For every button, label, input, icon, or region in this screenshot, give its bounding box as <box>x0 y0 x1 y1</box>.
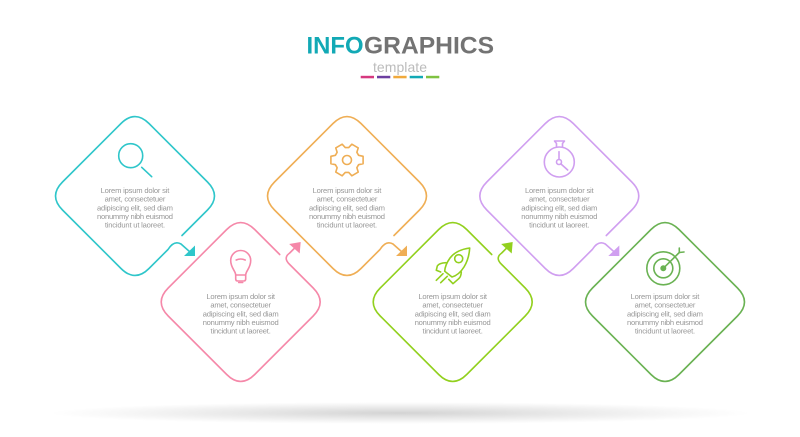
text block: nonummy nibh euismod <box>97 212 173 221</box>
text block: amet, consectetuer <box>422 301 484 310</box>
diamond outline with arrow <box>161 222 320 382</box>
text block: adipiscing elit, sed diam <box>627 309 703 318</box>
text block: tincidunt ut laoreet. <box>529 221 589 230</box>
text block <box>309 186 385 230</box>
diamond outline with arrow <box>373 222 532 382</box>
diamond outline with arrow <box>56 116 214 276</box>
text block: amet, consectetuer <box>105 195 166 204</box>
text block: adipiscing elit, sed diam <box>309 203 385 212</box>
icon: stopwatch <box>544 141 574 177</box>
text block: Lorem ipsum dolor sit <box>101 186 170 195</box>
text block: adipiscing elit, sed diam <box>521 203 597 212</box>
colour dashes <box>361 76 439 78</box>
text block <box>627 292 703 336</box>
text block: tincidunt ut laoreet. <box>423 327 483 336</box>
text block: Lorem ipsum dolor sit <box>525 186 595 195</box>
diamond outline <box>586 222 744 382</box>
icon: magnifier <box>119 144 152 177</box>
text block: tincidunt ut laoreet. <box>211 327 271 336</box>
text block: nonummy nibh euismod <box>203 318 279 327</box>
text block: adipiscing elit, sed diam <box>415 309 491 318</box>
text block: adipiscing elit, sed diam <box>97 203 173 212</box>
icon: gear <box>331 144 363 176</box>
text block: Lorem ipsum dolor sit <box>206 292 276 301</box>
panel: step 1 search <box>56 116 214 276</box>
text block: tincidunt ut laoreet. <box>635 327 695 336</box>
text block: Lorem ipsum dolor sit <box>313 186 382 195</box>
text block: nonummy nibh euismod <box>521 212 597 221</box>
text block: amet, consectetuer <box>317 195 378 204</box>
text block: tincidunt ut laoreet. <box>105 221 165 230</box>
text block: Lorem ipsum dolor sit <box>418 292 488 301</box>
diamond outline with arrow <box>268 116 426 276</box>
icon: light bulb <box>231 250 251 282</box>
text block <box>415 292 491 336</box>
diamond outline with arrow <box>480 116 639 276</box>
text block: adipiscing elit, sed diam <box>203 309 279 318</box>
panel: step 3 settings <box>268 116 426 276</box>
text block: nonummy nibh euismod <box>415 318 491 327</box>
title <box>306 32 494 59</box>
text block: amet, consectetuer <box>529 195 590 204</box>
icon: rocket <box>436 248 470 284</box>
subtitle: template <box>373 59 427 75</box>
text block: tincidunt ut laoreet. <box>317 221 377 230</box>
title word: INFO: INFO <box>306 32 364 59</box>
text block: amet, consectetuer <box>210 301 272 310</box>
text block: Lorem ipsum dolor sit <box>631 292 700 301</box>
text block <box>203 292 279 336</box>
ground shadow <box>50 402 750 424</box>
text block: amet, consectetuer <box>635 301 696 310</box>
title word: GRAPHICS: GRAPHICS <box>364 32 494 59</box>
panel: step 2 idea <box>161 222 320 382</box>
text block: nonummy nibh euismod <box>627 318 703 327</box>
icon: target <box>647 248 684 285</box>
panel: step 5 time <box>480 116 639 276</box>
panel: step 4 launch <box>373 222 532 382</box>
panel: step 6 target <box>586 222 744 382</box>
text block: nonummy nibh euismod <box>309 212 385 221</box>
text block <box>97 186 173 230</box>
text block <box>521 186 597 230</box>
